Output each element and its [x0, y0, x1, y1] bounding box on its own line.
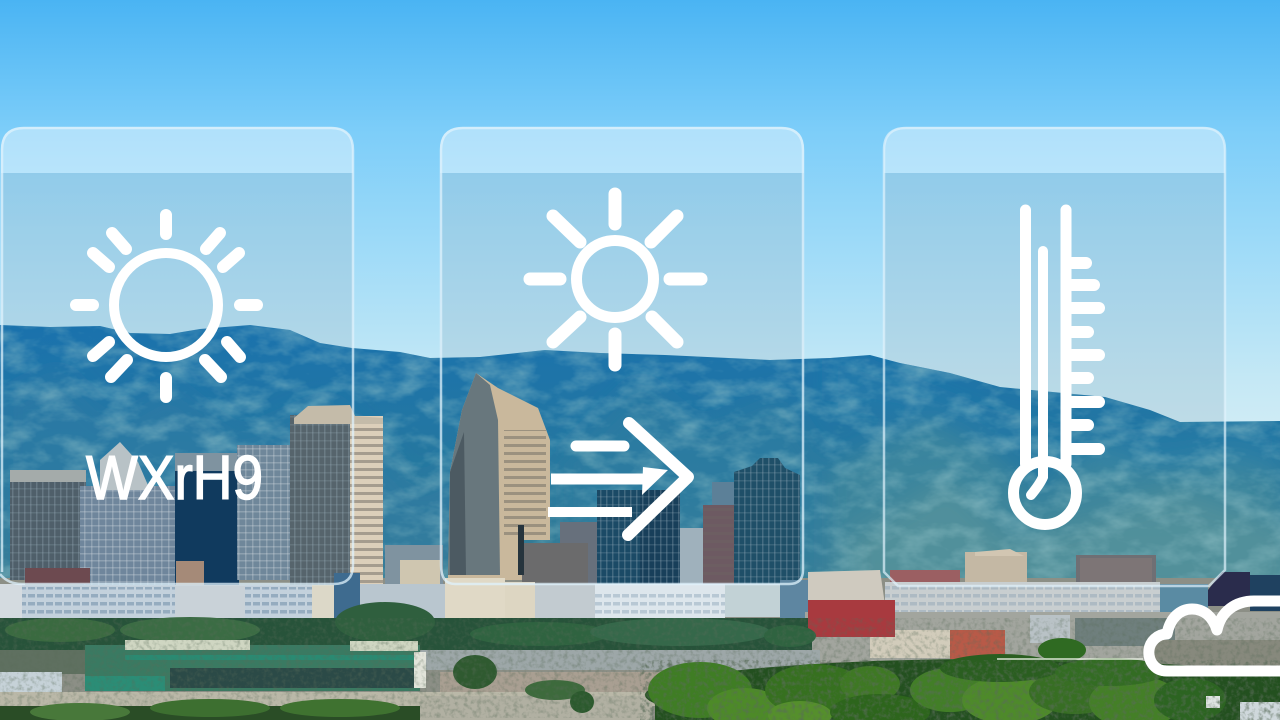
- mid-ground district: [0, 600, 1280, 720]
- waterfront base buildings: [0, 572, 1280, 624]
- mountain range: [0, 320, 1280, 600]
- foreground trees: [0, 638, 1280, 720]
- city skyline: [0, 373, 1280, 720]
- panel: centre outline: [441, 128, 803, 584]
- buildings: right background: [808, 549, 1156, 605]
- label: garbled panel text: WXrH9: [86, 444, 263, 513]
- sky background: [0, 0, 1280, 430]
- icon: thermometer: [1014, 210, 1099, 524]
- buildings: left cluster: [10, 405, 443, 590]
- icon: wind arrow: [548, 423, 688, 535]
- buildings: centre cluster: [448, 373, 800, 585]
- thin horizon line: [997, 658, 1143, 660]
- icon: sun with twelve rays: [76, 215, 257, 397]
- icon: sun with eight rays: [530, 194, 701, 365]
- icon: cloud outline: [1149, 601, 1280, 671]
- ground fill: [0, 578, 1280, 720]
- panel: right outline: [884, 128, 1225, 586]
- panel: left outline: [0, 128, 353, 584]
- panel glass fills: [1, 127, 1225, 430]
